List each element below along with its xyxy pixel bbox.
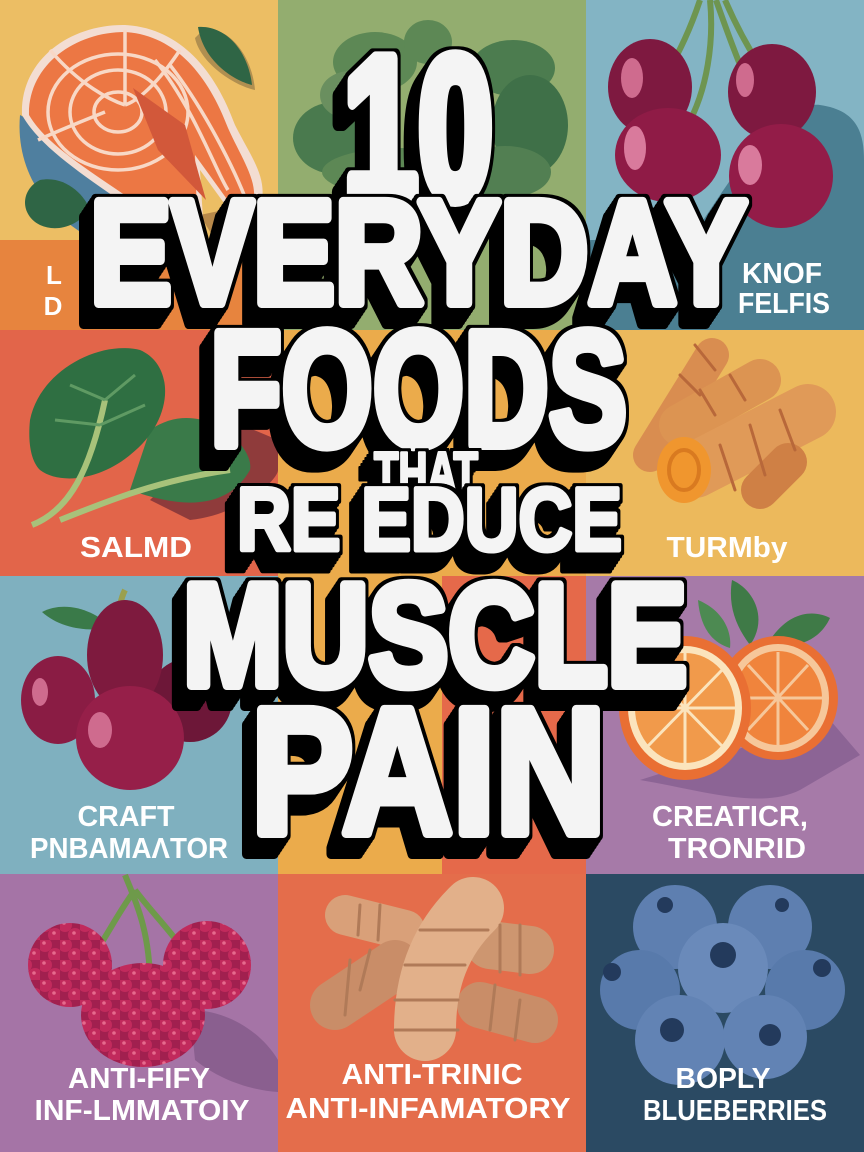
icon: ginger [335,905,535,1040]
icon: blueberries [600,885,845,1085]
icon: cherries left [21,590,232,790]
caption: top right: KNOF [742,258,822,290]
caption: ginger: ANTI-INFAMATORY [286,1093,570,1125]
caption: raspberries: INF-LMMATOIY [34,1095,250,1127]
caption: top right: FELFIS [738,288,830,320]
icon: spinach leaves [29,348,278,525]
title: EVERYDAY: EVERYDAY [90,171,747,335]
title: FOODS: FOODS [210,297,627,480]
caption: top right [738,258,830,320]
caption: ginger: ANTI-TRINIC [342,1059,523,1091]
title: 10: 10 [343,15,493,242]
icon: cherries top right [608,0,864,240]
caption: blueberries: BOPLY [676,1063,770,1095]
caption: raspberries [34,1063,250,1127]
caption: cherries [30,801,228,865]
caption: oranges: CREATICR, [652,801,808,833]
caption: oranges [652,801,808,865]
caption: top left [44,260,62,321]
icon: spinach bunch [293,20,568,198]
caption: turmeric: TURMbу [666,532,788,564]
title: MUSCLE: MUSCLE [183,554,687,716]
title: PAIN: PAIN [251,671,606,871]
icon: orange slices [619,580,860,799]
caption: top left: D [44,291,62,321]
icon: salmon steak [20,25,278,268]
caption: cherries: PNBAMAΛTOR [30,833,228,865]
caption: blueberries: BLUEBERRIES [643,1095,827,1127]
caption: cherries: CRAFT [78,801,175,833]
caption: top left: L [46,260,62,290]
caption: blueberries [643,1063,827,1127]
caption: oranges: TRONRID [668,833,806,865]
caption: ginger [286,1059,570,1125]
title: THAT: THAT [374,441,478,506]
title: REDUCE: RE EDUCE [237,469,622,569]
icon: raspberries [28,875,278,1092]
icon: turmeric [650,345,808,503]
caption: salmon: SALMD [80,532,192,564]
caption: raspberries: ANTI-FIFY [68,1063,210,1095]
